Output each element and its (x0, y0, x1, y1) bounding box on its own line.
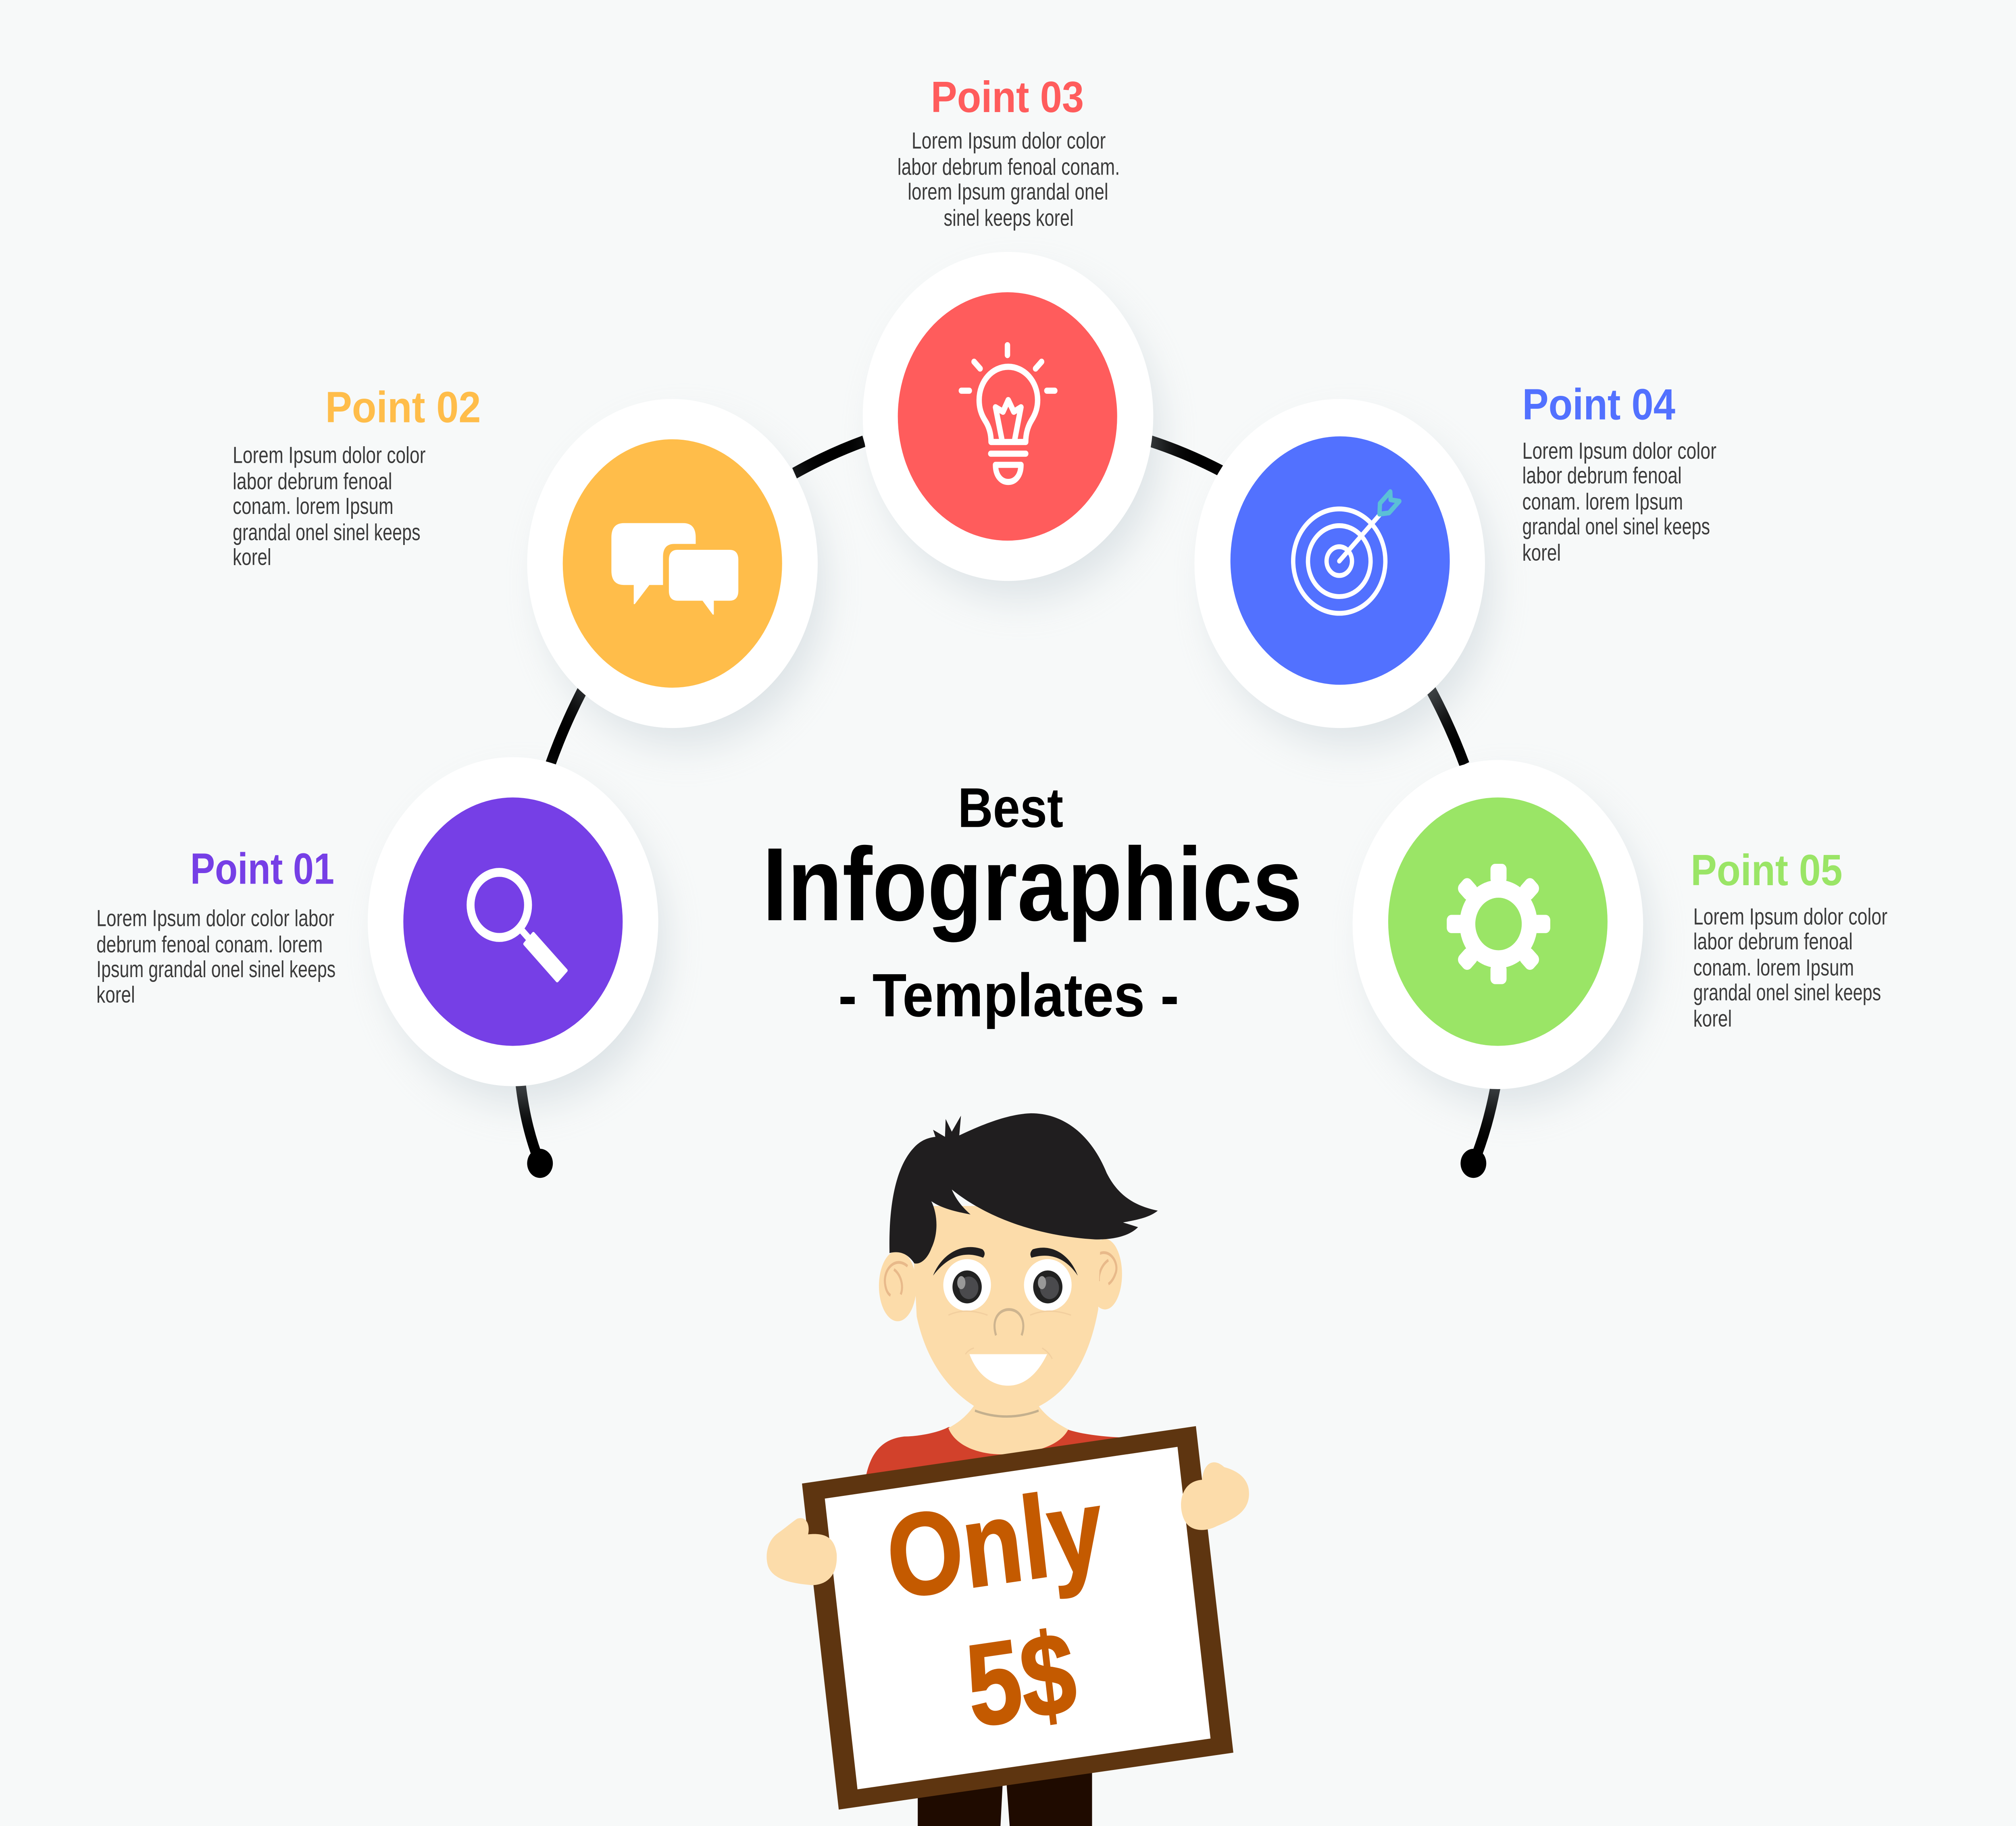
text block: point 03: Lorem Ipsum dolor color (912, 128, 1106, 154)
sign text: price: 5$ (960, 1607, 1082, 1751)
sign board (825, 1447, 1210, 1789)
text block: point 04 (1522, 380, 1716, 566)
text block: point 05 (1691, 846, 1887, 1032)
left hand (766, 1518, 837, 1585)
icon: magnifier (471, 872, 566, 981)
title: - Templates - (838, 961, 1179, 1029)
text block: point 05: Point 05 (1691, 846, 1843, 895)
text block: point 04: labor debrum fenoal (1522, 463, 1682, 489)
text block: point 05: korel (1693, 1006, 1732, 1032)
legs (918, 1766, 1092, 1826)
shirt (865, 1427, 1120, 1483)
icon: gear (1447, 864, 1550, 984)
nose and cheeks (948, 1310, 1071, 1416)
text block: point 01: debrum fenoal conam. lorem (96, 932, 323, 957)
text block: point 02: labor debrum fenoal (233, 469, 392, 494)
text block: point 02: grandal onel sinel keeps (233, 520, 421, 545)
text block: point 04: Point 04 (1522, 380, 1675, 429)
hair (889, 1113, 1158, 1264)
connector arc (521, 441, 1495, 1178)
icon: light bulb (961, 345, 1055, 482)
text block: point 01: korel (96, 982, 135, 1008)
icon: target with arrow (1293, 492, 1400, 614)
text block: point 04: korel (1522, 540, 1561, 566)
text block: point 02: korel (233, 545, 271, 570)
face (911, 1206, 1102, 1412)
text block: point 02: Point 02 (325, 383, 481, 432)
text block: point 03: Point 03 (931, 73, 1084, 121)
title (762, 776, 1302, 1029)
text block: point 05: labor debrum fenoal (1693, 929, 1853, 955)
eyes (943, 1259, 1072, 1311)
text block: point 04: conam. lorem Ipsum (1522, 489, 1683, 515)
text block: point 03: sinel keeps korel (944, 205, 1074, 231)
text block: point 01: Ipsum grandal onel sinel keeps (96, 957, 335, 982)
text block: point 01 (96, 844, 335, 1008)
panel: point 02 node (527, 399, 825, 745)
panel: point 03 node (863, 252, 1161, 599)
text block: point 03: labor debrum fenoal conam. (898, 154, 1120, 180)
mouth (969, 1354, 1047, 1386)
text block: point 02 (233, 383, 481, 570)
panel: point 05 node (1353, 760, 1651, 1105)
sign frame (802, 1426, 1233, 1809)
panel: point 04 node (1194, 399, 1493, 745)
text block: point 04: Lorem Ipsum dolor color (1522, 438, 1716, 464)
text block: point 02: Lorem Ipsum dolor color (233, 443, 426, 468)
text block: point 03: lorem Ipsum grandal onel (908, 179, 1108, 205)
text block: point 01: Point 01 (190, 844, 334, 893)
ears (879, 1239, 1122, 1321)
right hand (1181, 1462, 1249, 1530)
eyebrows (933, 1247, 1078, 1276)
panel: point 01 node (368, 757, 666, 1104)
text block: point 05: conam. lorem Ipsum (1693, 955, 1854, 981)
text block: point 03 (898, 73, 1120, 231)
text block: point 04: grandal onel sinel keeps (1522, 514, 1710, 539)
sign text: Only: Only (881, 1463, 1110, 1624)
neck (948, 1406, 1068, 1454)
character holding sign (766, 1113, 1249, 1826)
icon: chat bubbles (611, 523, 738, 615)
text block: point 05: Lorem Ipsum dolor color (1693, 904, 1887, 930)
title: Infographics (762, 826, 1302, 942)
text block: point 02: conam. lorem Ipsum (233, 493, 394, 519)
text block: point 01: Lorem Ipsum dolor color labor (96, 905, 334, 931)
title: Best (958, 776, 1063, 839)
text block: point 05: grandal onel sinel keeps (1693, 980, 1881, 1005)
